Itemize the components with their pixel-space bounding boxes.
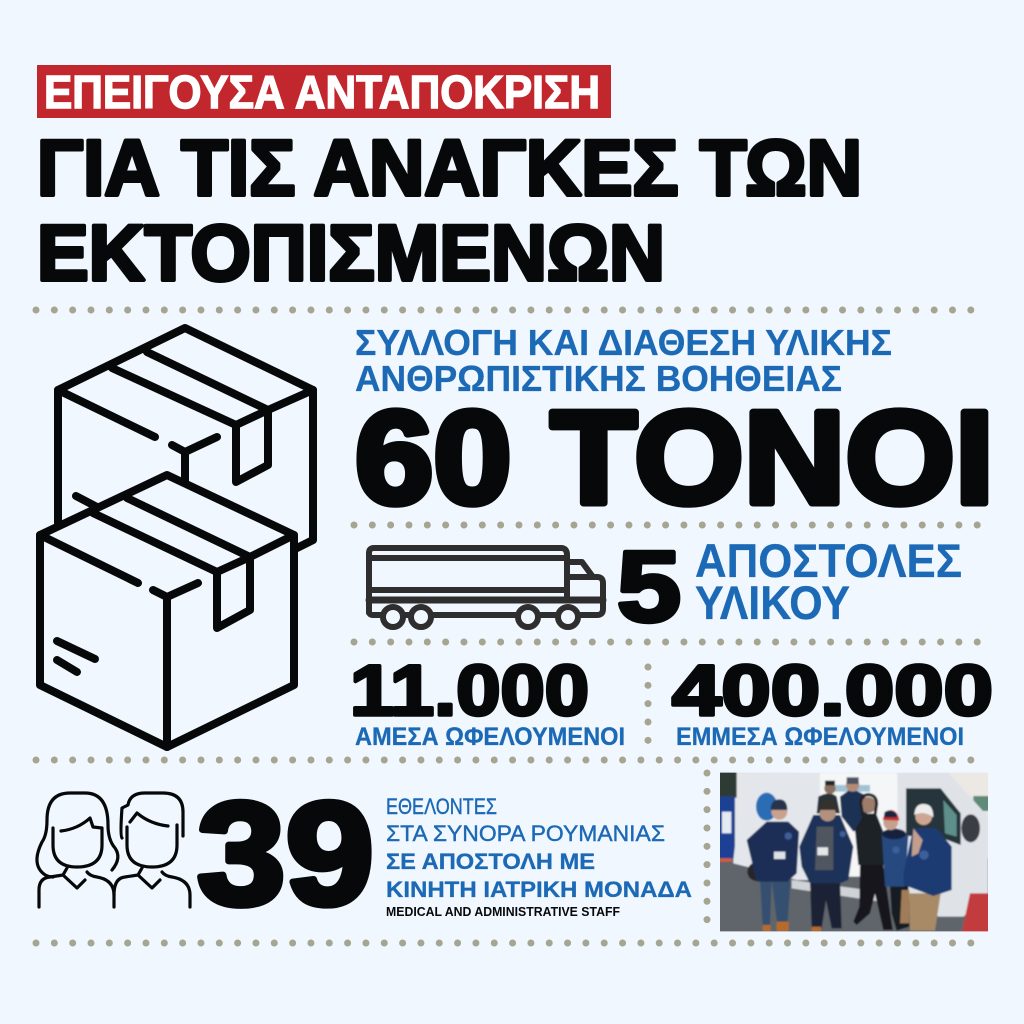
- text: collection heading: ΣΥΛΛΟΓΗ ΚΑΙ ΔΙΑΘΕΣΗ ΥΛΙΚΗΣ: [355, 322, 892, 363]
- stat: 5 shipments: ΑΠΟΣΤΟΛΕΣ: [695, 534, 962, 587]
- icon: stacked cardboard boxes: [40, 328, 313, 747]
- text: volunteers description: MEDICAL AND ADMINISTRATIVE STAFF: [386, 904, 620, 919]
- stat: 5 shipments: 5: [617, 531, 681, 643]
- stat: 60 tons: 60 ΤΟΝΟΙ: [355, 384, 994, 531]
- text: volunteers description: [386, 794, 692, 919]
- text: volunteers description: ΣΤΑ ΣΥΝΟΡΑ ΡΟΥΜΑΝΙΑΣ: [386, 821, 665, 846]
- photo: volunteers in front of mobile medical van: [718, 771, 990, 933]
- text: volunteers description: ΣΕ ΑΠΟΣΤΟΛΗ ΜΕ: [386, 849, 595, 874]
- stat: 11.000 direct beneficiaries: 11.000: [350, 652, 589, 731]
- icon: truck: [369, 548, 603, 627]
- title: ΕΚΤΟΠΙΣΜΕΝΩΝ: [37, 208, 665, 297]
- stat: 11.000 direct beneficiaries: [350, 652, 625, 751]
- stat: 5 shipments: [617, 531, 962, 643]
- heading: red banner: ΕΠΕΙΓΟΥΣΑ ΑΝΤΑΠΟΚΡΙΣΗ: [44, 66, 600, 118]
- stat: 39 volunteers: 39: [197, 772, 374, 935]
- stat: 400.000 indirect beneficiaries: ΕΜΜΕΣΑ ΩΦΕΛΟΥΜΕΝΟΙ: [676, 723, 964, 751]
- stat: 11.000 direct beneficiaries: ΑΜΕΣΑ ΩΦΕΛΟΥΜΕΝΟΙ: [355, 723, 625, 751]
- stat: 5 shipments: ΥΛΙΚΟΥ: [695, 576, 850, 629]
- text: collection heading: [355, 322, 892, 399]
- stat: 400.000 indirect beneficiaries: 400.000: [672, 652, 993, 731]
- icon: two volunteers: [37, 793, 190, 907]
- text: volunteers description: ΚΙΝΗΤΗ ΙΑΤΡΙΚΗ ΜΟΝΑΔΑ: [386, 877, 692, 902]
- title: ΓΙΑ ΤΙΣ ΑΝΑΓΚΕΣ ΤΩΝ: [37, 123, 862, 212]
- title: [37, 123, 862, 297]
- text: collection heading: ΑΝΘΡΩΠΙΣΤΙΚΗΣ ΒΟΗΘΕΙΑΣ: [355, 358, 842, 399]
- stat: 400.000 indirect beneficiaries: [672, 652, 993, 751]
- text: volunteers description: ΕΘΕΛΟΝΤΕΣ: [386, 794, 497, 819]
